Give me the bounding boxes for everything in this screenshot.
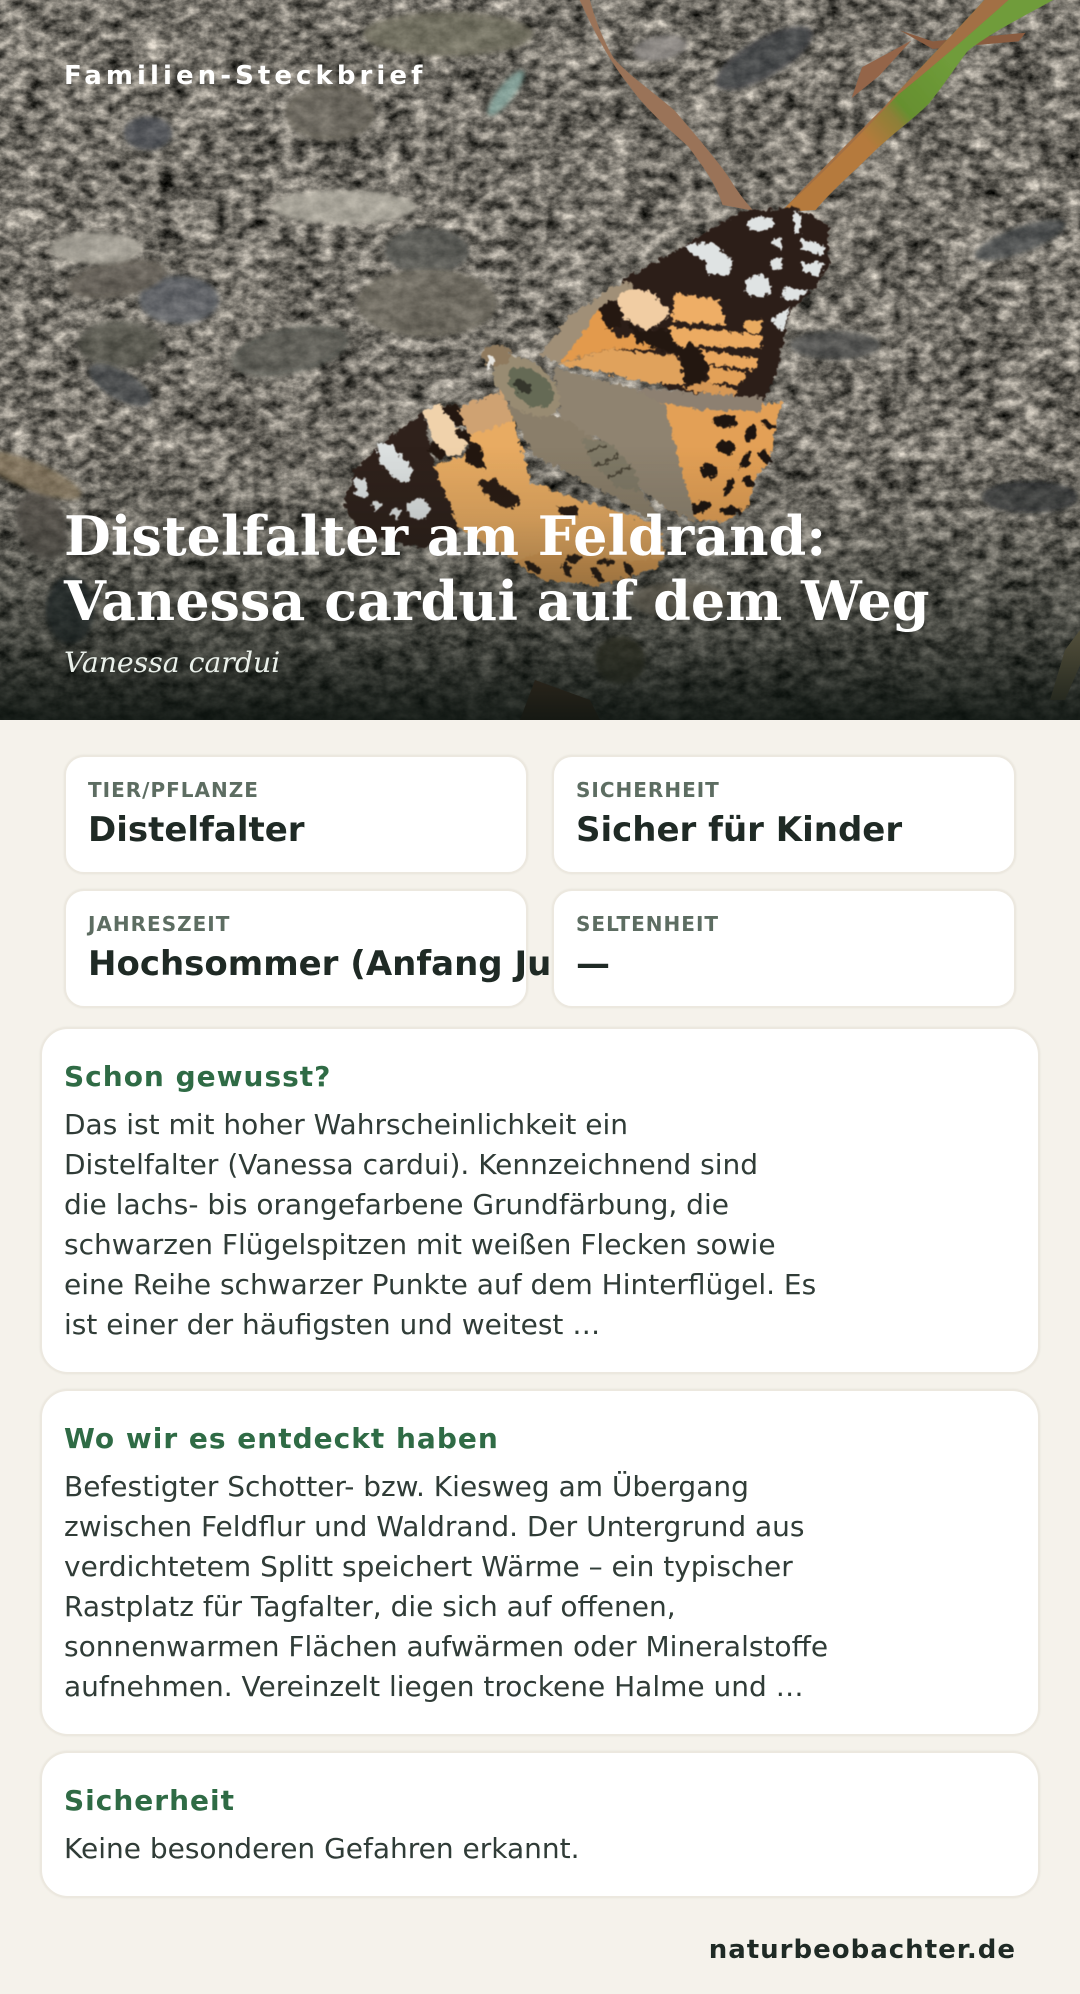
body text: zwischen Feldflur und Waldrand. Der Untergrund aus (64, 1510, 804, 1543)
card: Sicherheit (552, 755, 1016, 874)
body text: eine Reihe schwarzer Punkte auf dem Hinterflügel. Es (64, 1268, 816, 1301)
butterfly (344, 207, 829, 586)
body text (64, 1108, 816, 1341)
body text: die lachs- bis orangefarbene Grundfärbung, die (64, 1188, 729, 1221)
panel: Wo wir es entdeckt haben (40, 1389, 1040, 1736)
dark gradient overlay (0, 0, 1080, 720)
scientific name: Vanessa cardui (64, 646, 280, 679)
body text: Befestigter Schotter- bzw. Kiesweg am Übergang (64, 1470, 749, 1503)
heading: Schon gewusst? (64, 1060, 331, 1093)
green stem (781, 0, 1053, 212)
body text: schwarzen Flügelspitzen mit weißen Flecken sowie (64, 1228, 776, 1261)
dry leaf at lower right (1050, 630, 1080, 700)
body text: ist einer der häufigsten und weitest … (64, 1308, 600, 1341)
body text: sonnenwarmen Flächen aufwärmen oder Mineralstoffe (64, 1630, 828, 1663)
title: Distelfalter am Feldrand: (64, 504, 826, 568)
card: Tier/Pflanze: TIER/PFLANZE (88, 778, 259, 802)
eyebrow label: Familien-Steckbrief (64, 61, 426, 91)
card: Seltenheit: — (576, 944, 610, 984)
dry leaf strip (900, 30, 1026, 49)
brown grass blade (580, 0, 754, 211)
footer: site name: naturbeobachter.de (709, 1935, 1016, 1965)
body text: Rastplatz für Tagfalter, die sich auf offenen, (64, 1590, 676, 1623)
stem brown edge (786, 0, 1008, 207)
lower forewing (344, 393, 664, 584)
body text: verdichtetem Splitt speichert Wärme – ein typischer (64, 1550, 793, 1583)
head (481, 345, 510, 367)
card: Sicherheit: SICHERHEIT (576, 778, 720, 802)
leaf at lower centre (520, 680, 600, 720)
upper forewing (540, 207, 829, 409)
hind wing (647, 400, 781, 521)
body text: Keine besonderen Gefahren erkannt. (64, 1832, 580, 1865)
title (64, 504, 929, 633)
panel: hero photo with title (0, 0, 1080, 720)
stones (0, 12, 1078, 684)
card: Jahreszeit (64, 889, 528, 1008)
abdomen (582, 438, 640, 492)
title: Vanessa cardui auf dem Weg (64, 569, 929, 633)
heading: Wo wir es entdeckt haben (64, 1422, 499, 1455)
thorax (482, 344, 571, 429)
body text: Distelfalter (Vanessa cardui). Kennzeichnend sind (64, 1148, 758, 1181)
body text (64, 1470, 828, 1703)
body text: Das ist mit hoher Wahrscheinlichkeit ein (64, 1108, 628, 1141)
heading: Sicherheit (64, 1784, 235, 1817)
card: Jahreszeit: JAHRESZEIT (88, 912, 230, 936)
panel: Sicherheit (40, 1751, 1040, 1898)
folded wing edge (637, 388, 763, 411)
panel: Schon gewusst (40, 1027, 1040, 1374)
body text: aufnehmen. Vereinzelt liegen trockene Halme und … (64, 1670, 804, 1703)
card: Jahreszeit: Hochsommer (Anfang Ju (88, 944, 551, 984)
card: Seltenheit: SELTENHEIT (576, 912, 719, 936)
card: Tier/Pflanze (64, 755, 528, 874)
dry leaves and stems (580, 0, 1053, 212)
card: Tier/Pflanze: Distelfalter (88, 810, 305, 850)
lower forewing white spots (353, 442, 430, 519)
lower hind wing edge (516, 552, 664, 586)
body hair and folded wing base (554, 368, 695, 521)
card: Sicherheit: Sicher für Kinder (576, 810, 902, 850)
dry leaf (852, 41, 911, 98)
card: Seltenheit (552, 889, 1016, 1008)
photo: butterfly on gravel (0, 0, 1080, 720)
hind wing spots (688, 415, 777, 516)
white wing spots (686, 211, 826, 330)
gravel texture (0, 0, 1080, 720)
